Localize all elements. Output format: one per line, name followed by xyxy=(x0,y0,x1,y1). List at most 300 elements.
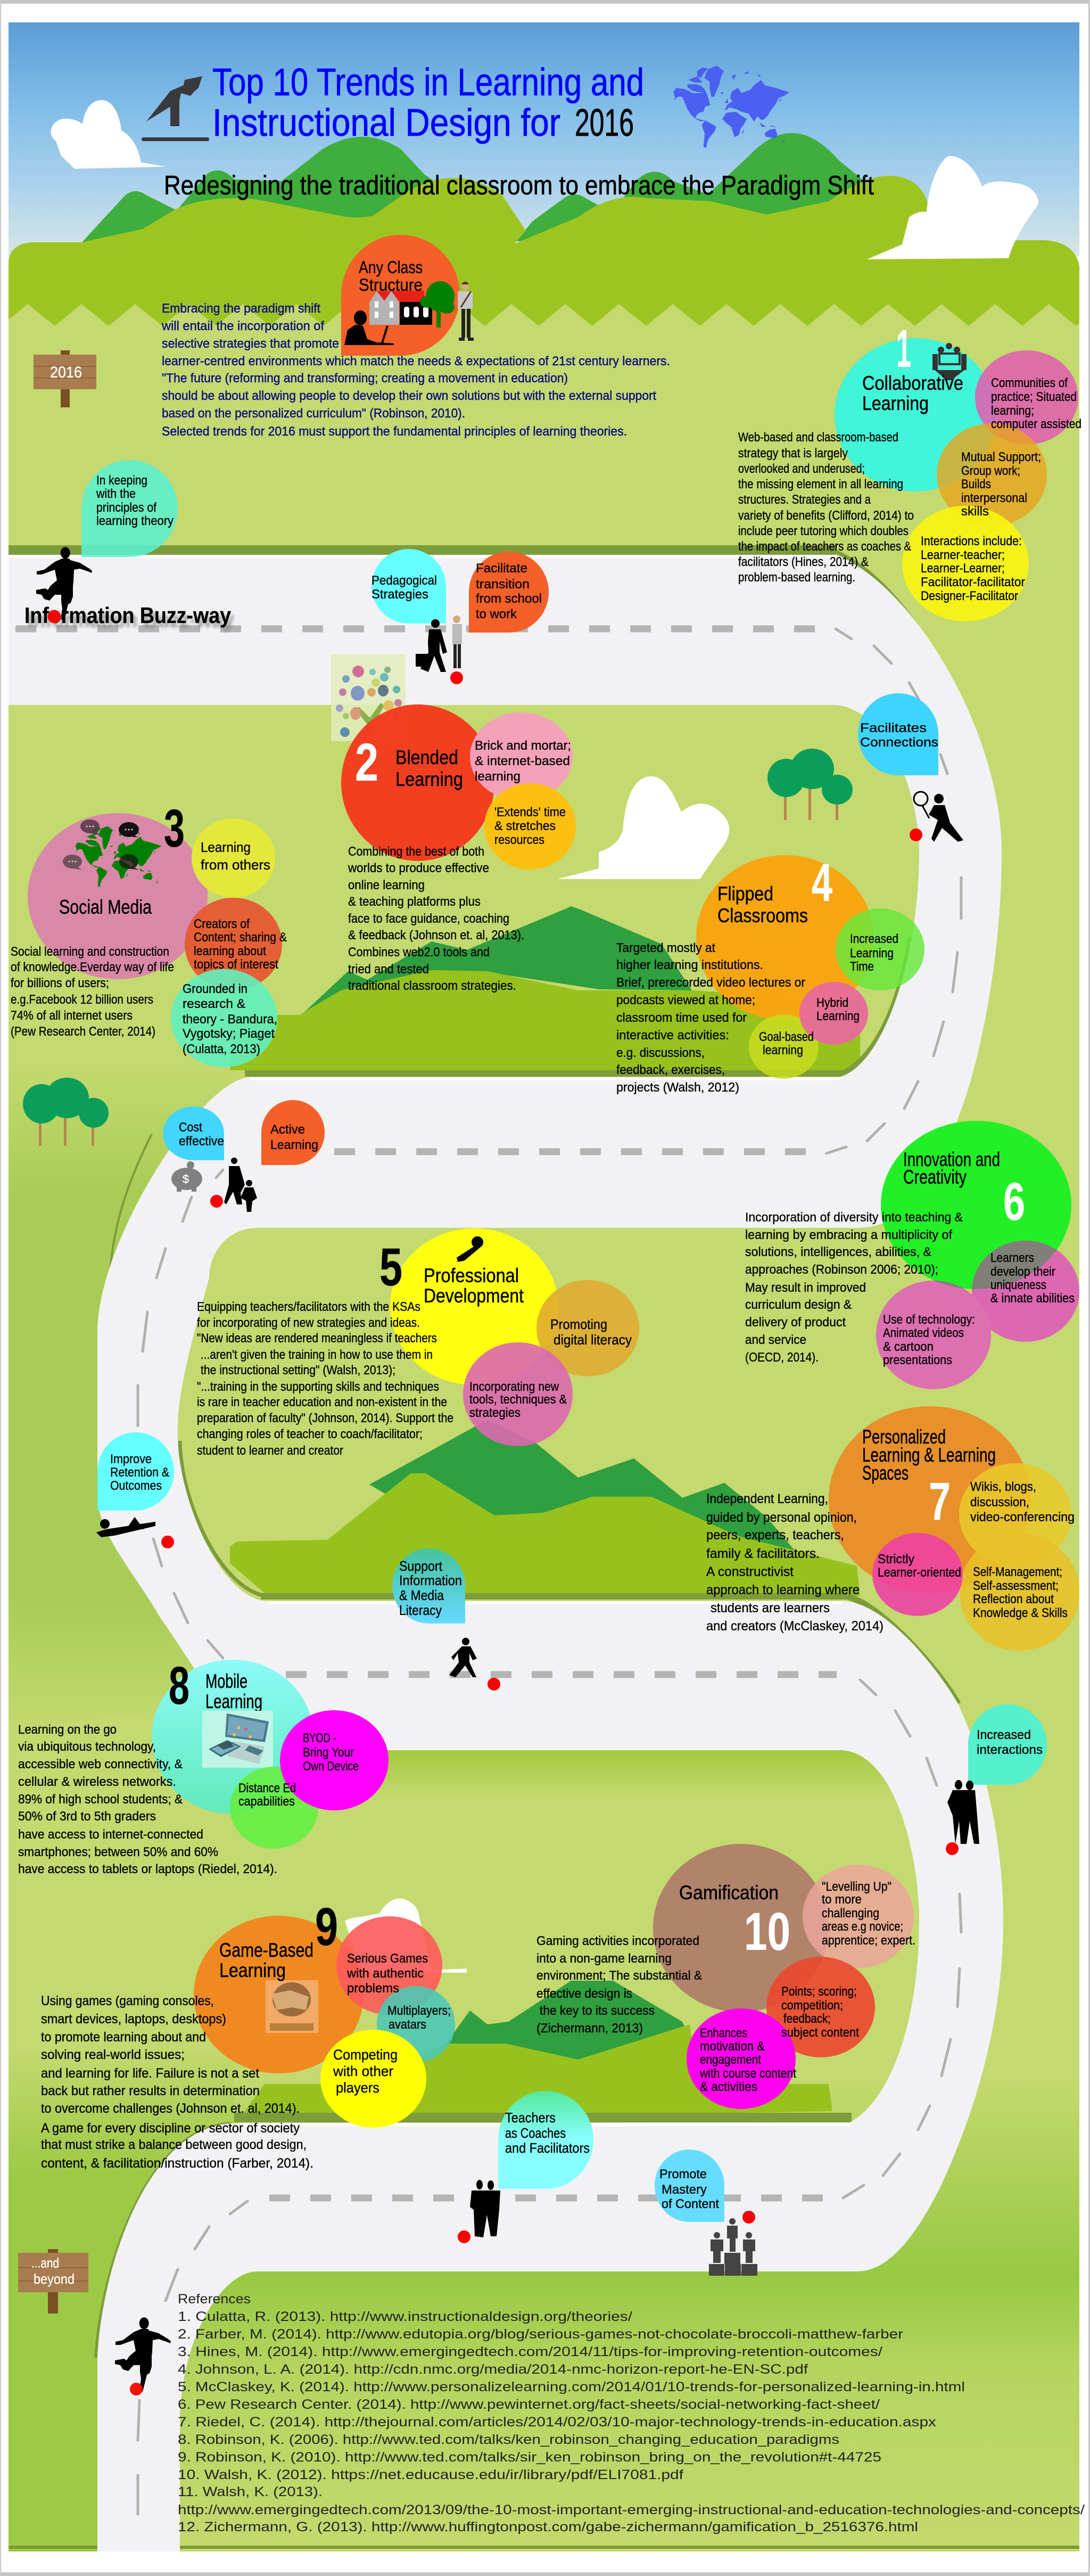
panel: 4 flipped classrooms xyxy=(616,853,924,1095)
bubble: multiplayers xyxy=(377,1986,455,2062)
label: enhances motivation: Enhances xyxy=(700,2026,747,2040)
heading: Innovation and xyxy=(903,1148,1000,1170)
label: enhances motivation: & activities xyxy=(700,2080,757,2094)
bubble: points and scoring xyxy=(766,1957,875,2057)
icon: speech bubbles xyxy=(63,819,139,870)
body text xyxy=(348,844,524,993)
bubble: extends time: 'Extends' time xyxy=(494,805,566,819)
body text: family & facilitators. xyxy=(706,1546,820,1561)
bubble: brick and mortar: learning xyxy=(475,769,521,784)
learners label: Learners xyxy=(990,1251,1034,1265)
body text: the key to its success xyxy=(540,2004,655,2018)
body text: & teaching platforms plus xyxy=(348,895,481,909)
callout: in keeping with learning theory: In keeping xyxy=(96,473,147,488)
label: interactions: Interactions include: xyxy=(921,534,1022,548)
body text: e.g.Facebook 12 billion users xyxy=(11,992,153,1007)
heading: Mobile xyxy=(205,1670,247,1692)
body text: Web-based and classroom-based xyxy=(738,430,898,445)
heading line 2: Development xyxy=(424,1285,524,1307)
label: multiplayers: avatars xyxy=(389,2017,426,2032)
callout: facilitate transition xyxy=(469,552,549,633)
icon: parent and child xyxy=(224,1158,257,1212)
body text: students are learners xyxy=(711,1601,830,1615)
title line 2: Instructional Design for xyxy=(212,102,560,144)
label: communities of practice xyxy=(991,376,1081,431)
label: wikis and blogs xyxy=(970,1480,1075,1524)
number 1: 1 xyxy=(896,319,911,379)
body text: facilitators (Hines, 2014) & xyxy=(738,555,869,569)
references: 7. Riedel, C. (2014). http://thejournal.com/articles/2014/02/03/10-major-technology-trends-in-education.aspx xyxy=(178,2415,937,2430)
body text: via ubiquitous technology, xyxy=(18,1740,156,1754)
signpost: and beyond: ...and xyxy=(31,2255,59,2271)
icon: podium with people xyxy=(709,2218,757,2276)
signpost: 2016: 2016 xyxy=(50,364,82,381)
body text: curriculum design & xyxy=(745,1298,852,1312)
callout: promote mastery xyxy=(655,2150,724,2222)
marker: red dot xyxy=(161,1536,174,1548)
icon: runner xyxy=(449,1638,477,1677)
main bubble xyxy=(653,1844,829,2012)
bubble: increased learning time: Time xyxy=(850,959,874,974)
label: communities of practice: learning; xyxy=(991,404,1034,418)
label: grounded in research: (Culatta, 2013) xyxy=(183,1042,260,1056)
bubble: byod xyxy=(280,1710,389,1810)
callout: in keeping with learning theory: with the xyxy=(96,487,136,501)
main bubble xyxy=(835,338,996,491)
bubble: use of technology xyxy=(876,1281,991,1389)
body text: to promote learning about and xyxy=(41,2030,206,2045)
heading line 2: Learning xyxy=(205,1691,262,1712)
label: competing: with other xyxy=(333,2063,393,2079)
marker: red dot xyxy=(48,610,61,623)
icon: piggy bank xyxy=(171,1161,202,1192)
body text: learning by embracing a multiplicity of xyxy=(745,1228,952,1242)
text block: introduction: selective strategies that promote xyxy=(162,337,339,351)
bubble: competing xyxy=(320,2030,426,2128)
text block: introduction: Selected trends for 2016 must support the fundamental principles of learning theories. xyxy=(162,424,627,439)
icon: racket player xyxy=(914,792,963,842)
icon: game book xyxy=(266,1980,318,2033)
goal-based label: learning xyxy=(763,1043,803,1057)
main bubble xyxy=(390,1228,558,1385)
body text: back but rather results in determination xyxy=(41,2083,260,2098)
label: strictly learner-oriented: Strictly xyxy=(878,1552,914,1566)
signpost: and beyond: beyond xyxy=(34,2271,75,2287)
body text: accessible web connectivity, & xyxy=(18,1757,183,1771)
label: mutual support: Mutual Support; xyxy=(961,450,1041,464)
main bubble xyxy=(152,1660,313,1814)
bubble: strictly learner-oriented xyxy=(872,1533,963,1616)
text block: introduction: "The future (reforming and transforming; creating a movement in education) xyxy=(162,371,568,385)
label: grounded in research xyxy=(183,982,277,1056)
background: front light green hill xyxy=(9,176,1079,330)
bubble: learning from others: Learning xyxy=(201,839,251,855)
body text: for incorporating of new strategies and ideas. xyxy=(197,1316,420,1330)
body text: into a non-game learning xyxy=(536,1951,672,1966)
number 9: 9 xyxy=(315,1897,338,1957)
callout: facilitates connections: Connections xyxy=(860,735,938,750)
heading: Personalized xyxy=(862,1426,946,1448)
label: serious games: problems xyxy=(347,1981,399,1996)
bubble: brick and mortar xyxy=(470,712,573,801)
body text: podcasts viewed at home; xyxy=(616,993,755,1007)
label: communities of practice: practice; Situated xyxy=(991,390,1077,404)
callout: pedagogical strategies xyxy=(371,549,446,624)
label: interactions: Designer-Facilitator xyxy=(921,589,1018,603)
body text xyxy=(18,1722,277,1876)
icon: tablet devices xyxy=(202,1711,273,1768)
callout: promote mastery: Mastery xyxy=(662,2183,707,2197)
signpost: and beyond xyxy=(18,2249,88,2314)
subtitle: Redesigning the traditional classroom to embrace the Paradigm Shift xyxy=(164,170,874,200)
trees left xyxy=(23,1078,109,1146)
body text: is rare in teacher education and non-existent in the xyxy=(197,1395,447,1409)
body text: tried and tested xyxy=(348,962,429,977)
heading: Professional xyxy=(424,1265,519,1286)
text block: introduction xyxy=(161,301,670,439)
label: grounded in research: research & xyxy=(183,997,245,1011)
label: Any Class xyxy=(359,258,423,277)
label: points and scoring: competition; xyxy=(781,1998,843,2013)
body text: to overcome challenges (Johnson et. al, 2014). xyxy=(41,2101,300,2116)
title xyxy=(212,61,644,144)
body text: classroom time used for xyxy=(616,1011,747,1025)
body text: have access to internet-connected xyxy=(18,1827,203,1842)
number 3: 3 xyxy=(164,799,185,858)
callout: improve retention xyxy=(97,1432,174,1511)
bubble: communities of practice xyxy=(975,350,1078,445)
icon: piggy bank: $ xyxy=(183,1172,189,1186)
callout: promote mastery: of Content xyxy=(662,2197,719,2211)
body text: Incorporation of diversity into teaching & xyxy=(745,1210,963,1225)
bubble: brick and mortar: & internet-based xyxy=(475,754,570,768)
body text: problem-based learning. xyxy=(738,570,855,585)
bubble: grounded in research xyxy=(171,969,277,1067)
heading: Social Media xyxy=(59,896,152,918)
callout: active learning xyxy=(261,1100,325,1165)
callout: teachers as coaches xyxy=(498,2091,593,2189)
learners label: uniqueness xyxy=(990,1278,1046,1292)
bubble: incorporating new tools: Incorporating new xyxy=(469,1380,559,1394)
number 6: 6 xyxy=(1003,1172,1025,1232)
body text: the missing element in all learning xyxy=(738,477,903,491)
bubble: learning from others: from others xyxy=(201,857,270,873)
label: grounded in research: Vygotsky; Piaget xyxy=(183,1027,275,1041)
body text: changing roles of teacher to coach/facilitator; xyxy=(197,1427,423,1441)
body text: include peer tutoring which doubles xyxy=(738,524,909,538)
heading: Blended xyxy=(395,746,458,768)
body text xyxy=(616,941,805,1095)
title line 1: Top 10 Trends in Learning and xyxy=(212,61,644,104)
callout: teachers as coaches: and Facilitators xyxy=(505,2140,590,2156)
icon: school buildings xyxy=(369,291,432,325)
panel: 9 game-based learning xyxy=(41,1897,455,2171)
text block: introduction: Embracing the paradigm shift xyxy=(162,301,320,316)
label: points and scoring: Points; scoring; xyxy=(781,1984,857,1999)
bottom edge band xyxy=(9,2546,1079,2549)
body text: guided by personal opinion, xyxy=(706,1510,857,1525)
overlap shading xyxy=(935,1241,1057,1289)
body text: 89% of high school students; & xyxy=(18,1792,183,1807)
label: wikis and blogs: video-conferencing xyxy=(970,1510,1075,1524)
heading: information buzz-way: Information Buzz-way xyxy=(24,603,232,628)
body text: have access to tablets or laptops (Riedel, 2014). xyxy=(18,1862,277,1876)
body text xyxy=(706,1491,883,1634)
background: hills in field 2 xyxy=(230,906,860,1070)
bubble: distance ed xyxy=(230,1767,318,1849)
body text: environment; The substantial & xyxy=(536,1968,702,1983)
icon: world map xyxy=(673,65,789,148)
main bubble xyxy=(341,704,494,861)
learners label: develop their xyxy=(990,1265,1055,1279)
body text: student to learner and creator xyxy=(197,1443,343,1458)
body text xyxy=(41,1993,313,2171)
bubble: byod: Bring Your xyxy=(303,1745,354,1760)
bubble: increased learning time xyxy=(836,908,924,990)
marker: red dot xyxy=(130,2383,143,2395)
body text: overlooked and underused; xyxy=(738,462,865,476)
label: levelling up: challenging xyxy=(822,1906,879,1921)
label: enhances motivation xyxy=(699,2026,796,2094)
label line 2: Structure xyxy=(359,275,423,294)
body text: preparation of faculty" (Johnson, 2014). Support the xyxy=(197,1411,453,1425)
label: competing: players xyxy=(336,2080,379,2096)
label: self-management: Self-assessment; xyxy=(973,1579,1059,1593)
body text: cellular & wireless networks. xyxy=(18,1775,176,1789)
body text: variety of benefits (Clifford, 2014) to xyxy=(738,508,914,523)
number 2: 2 xyxy=(355,733,378,792)
callout: in keeping with learning theory xyxy=(81,460,178,557)
label: enhances motivation: motivation & xyxy=(700,2039,765,2054)
callout: cost effective: effective xyxy=(179,1134,224,1148)
technology label: Animated videos xyxy=(883,1326,964,1340)
body text: Independent Learning, xyxy=(706,1491,828,1506)
label: interactions: Facilitator-facilitator xyxy=(921,575,1025,589)
body text: (Pew Research Center, 2014) xyxy=(11,1024,155,1039)
callout: active learning: Learning xyxy=(270,1138,318,1152)
bubble: incorporating new tools: strategies xyxy=(469,1406,521,1420)
body text: smartphones; between 50% and 60% xyxy=(18,1845,218,1859)
callout: in keeping with learning theory: principles of xyxy=(96,501,156,515)
label: serious games xyxy=(346,1951,428,1996)
label: levelling up: apprentice; expert. xyxy=(822,1933,915,1948)
label: strictly learner-oriented xyxy=(878,1552,961,1580)
heading line 2: Learning & Learning xyxy=(862,1444,996,1466)
callout: increased interactions: Increased xyxy=(977,1728,1031,1742)
technology label: & cartoon xyxy=(883,1340,934,1354)
callout: teachers as coaches: Teachers xyxy=(505,2110,556,2126)
label: competing: Competing xyxy=(333,2047,398,2063)
heading line 2: Creativity xyxy=(903,1166,967,1188)
callout: pedagogical strategies: Strategies xyxy=(371,587,428,602)
heading line 2: Learning xyxy=(395,768,463,790)
panel: 6 innovation and creativity xyxy=(745,1121,1079,1389)
icon: soccer player finish xyxy=(115,2317,171,2392)
goal-based label xyxy=(759,1030,814,1057)
learners label: & innate abilities xyxy=(990,1291,1075,1306)
body text: Combining the best of both xyxy=(348,844,484,859)
body text xyxy=(745,1210,963,1365)
bubble: increased learning time: Learning xyxy=(850,946,894,961)
bubble: enhances motivation xyxy=(687,2008,796,2109)
bubble: learners uniqueness xyxy=(972,1241,1079,1342)
label: serious games: with authentic xyxy=(346,1966,424,1981)
distance ed label: capabilities xyxy=(238,1794,295,1809)
bubble: interactions xyxy=(902,506,1029,621)
bubble: levelling up xyxy=(803,1865,914,1968)
body text: 74% of all internet users xyxy=(11,1008,133,1023)
main bubble xyxy=(829,1406,1031,1593)
body text: worlds to produce effective xyxy=(348,861,489,875)
body text: Combines web2.0 tools and xyxy=(348,945,490,959)
heading line 2: Classrooms xyxy=(717,905,808,926)
background: mid-field clouds xyxy=(345,776,729,1973)
label: self-management: Knowledge & Skills xyxy=(973,1606,1068,1620)
references: 1. Culatta, R. (2013). http://www.instructionaldesign.org/theories/ xyxy=(178,2309,632,2324)
callout: facilitate transition: transition xyxy=(476,577,530,592)
body text: and creators (McClaskey, 2014) xyxy=(706,1619,883,1634)
references: References xyxy=(178,2292,251,2307)
road shadows xyxy=(9,550,998,2358)
body text: Learning on the go xyxy=(18,1722,117,1737)
body text: and service xyxy=(745,1333,806,1347)
number 5: 5 xyxy=(379,1237,402,1297)
icon: green world map xyxy=(76,826,161,887)
goal-based label: Goal-based xyxy=(759,1030,814,1044)
label: mutual support: Builds xyxy=(961,477,991,491)
panel: 8 mobile learning xyxy=(18,1656,389,1876)
background: sky xyxy=(9,22,1079,257)
bubble: byod: BYOD - xyxy=(303,1731,336,1745)
callout: increased interactions: interactions xyxy=(977,1743,1043,1757)
bubble: hybrid learning xyxy=(799,982,868,1045)
text block: introduction: based on the personalized curriculum" (Robinson, 2010). xyxy=(162,406,465,421)
label: creators of content: topics of interest xyxy=(194,957,278,972)
marker: red dot xyxy=(488,1678,500,1691)
label: creators of content: learning about xyxy=(194,944,266,958)
body text: Gaming activities incorporated xyxy=(536,1934,699,1948)
body text: Brief, prerecorded video lectures or xyxy=(616,975,805,990)
body text: & feedback (Johnson et. al, 2013). xyxy=(348,928,524,942)
body text: Social learning and construction xyxy=(11,945,169,959)
icon: standing man xyxy=(458,282,474,341)
title year: 2016 xyxy=(575,102,634,144)
references: 10. Walsh, K. (2012). https://net.educause.edu/ir/library/pdf/ELI7081.pdf xyxy=(178,2467,683,2482)
body text: approaches (Robinson 2006; 2010); xyxy=(745,1262,938,1277)
marker: red dot xyxy=(450,671,463,684)
bubble: learning from others xyxy=(192,818,275,898)
label: points and scoring: subject content xyxy=(781,2025,859,2040)
body text: that must strike a balance between good design, xyxy=(41,2137,307,2152)
callout: cost effective xyxy=(163,1106,224,1160)
body text: feedback, exercises, xyxy=(616,1063,725,1077)
body text: ...aren't given the training in how to use them in xyxy=(201,1348,433,1362)
callout: active learning: Active xyxy=(270,1122,305,1137)
heading line 3: Spaces xyxy=(862,1462,909,1484)
icon: key xyxy=(457,1236,483,1262)
number 4: 4 xyxy=(812,853,832,913)
body text: for billions of users; xyxy=(11,976,109,990)
panel: 5 professional development xyxy=(197,1228,639,1458)
marker: red dot xyxy=(910,828,922,841)
callout: improve retention: Retention & xyxy=(110,1465,169,1480)
bubble: brick and mortar: Brick and mortar; xyxy=(475,739,571,753)
bubble: promoting digital literacy: digital literacy xyxy=(554,1332,632,1348)
callout: pedagogical strategies: Pedagogical xyxy=(371,573,437,588)
body text: May result in improved xyxy=(745,1281,866,1295)
body text: and learning for life. Failure is not a set xyxy=(41,2066,259,2081)
body text: effective design is xyxy=(536,1987,632,2001)
background: white clouds top xyxy=(51,100,1038,259)
label: serious games: Serious Games xyxy=(347,1951,428,1966)
label: interactions: Learner-teacher; xyxy=(921,548,1005,562)
label: levelling up xyxy=(822,1880,915,1948)
callout: support information: Support xyxy=(399,1558,443,1574)
bubble: hybrid learning: Learning xyxy=(816,1009,860,1023)
icon: person at laptop xyxy=(344,310,394,345)
panel: 2 blended learning xyxy=(341,704,576,993)
label: points and scoring xyxy=(781,1984,859,2040)
label: multiplayers: Multiplayers; xyxy=(387,2004,451,2018)
body text: content, & facilitation/instruction (Farber, 2014). xyxy=(41,2156,313,2171)
number 7: 7 xyxy=(929,1472,951,1531)
body text: the impact of teachers as coaches & xyxy=(738,539,911,554)
technology label: Use of technology: xyxy=(883,1312,975,1327)
label: self-management: Reflection about xyxy=(973,1592,1054,1606)
body text: approach to learning where xyxy=(706,1582,860,1597)
distance ed label xyxy=(238,1781,296,1809)
label: strictly learner-oriented: Learner-oriented xyxy=(878,1565,961,1580)
technology label: presentations xyxy=(883,1353,952,1367)
body text: online learning xyxy=(348,878,425,892)
icon: two people silhouette xyxy=(470,2180,500,2237)
body text: peers, experts, teachers, xyxy=(706,1528,844,1543)
marker: red dot xyxy=(742,2211,755,2224)
body text: traditional classroom strategies. xyxy=(348,979,516,993)
bubble: extends time: resources xyxy=(494,833,544,847)
body text: Equipping teachers/facilitators with the KSAs xyxy=(197,1300,420,1314)
callout: support information: & Media xyxy=(399,1587,444,1603)
heading line 2: Learning xyxy=(862,392,929,414)
background: hills in field 3 xyxy=(230,1421,860,1596)
background: distant dark green hills xyxy=(81,133,905,244)
bubble: serious games xyxy=(336,1916,442,2015)
body text: face to face guidance, coaching xyxy=(348,912,509,926)
bubble: self-management xyxy=(960,1533,1079,1651)
references: 6. Pew Research Center. (2014). http://www.pewinternet.org/fact-sheets/social-networking-fact-sheet/ xyxy=(178,2397,880,2412)
signpost: 2016 xyxy=(34,350,96,407)
icon: walker with briefcase and student xyxy=(416,616,462,672)
references: 2. Farber, M. (2014). http://www.edutopia.org/blog/serious-games-not-chocolate-broccoli-matthew-farber xyxy=(178,2327,903,2342)
bubble: increased learning time: Increased xyxy=(850,932,898,946)
bubble: promoting digital literacy xyxy=(536,1280,639,1376)
body text: structures. Strategies and a xyxy=(738,493,871,507)
panel: 7 personalized learning xyxy=(706,1406,1079,1651)
references: 9. Robinson, K. (2010). http://www.ted.com/talks/sir_ken_robinson_bring_on_the_revolution#t-44725 xyxy=(178,2450,881,2465)
bubble: incorporating new tools: tools, techniques & xyxy=(469,1392,567,1407)
label: enhances motivation: engagement xyxy=(700,2053,761,2067)
heading: Flipped xyxy=(717,883,773,905)
bubble: hybrid learning: Hybrid xyxy=(816,996,848,1010)
label: mutual support: skills xyxy=(961,504,989,519)
body text: the instructional setting" (Walsh, 2013); xyxy=(201,1363,395,1377)
body text: of knowledge.Everday way of life xyxy=(11,960,174,974)
callout: facilitate transition: Facilitate xyxy=(476,561,527,576)
icon: meeting group xyxy=(932,343,967,380)
body text xyxy=(197,1300,453,1458)
callout: facilitate transition: from school xyxy=(476,592,542,606)
icon: couple silhouette xyxy=(947,1780,979,1844)
